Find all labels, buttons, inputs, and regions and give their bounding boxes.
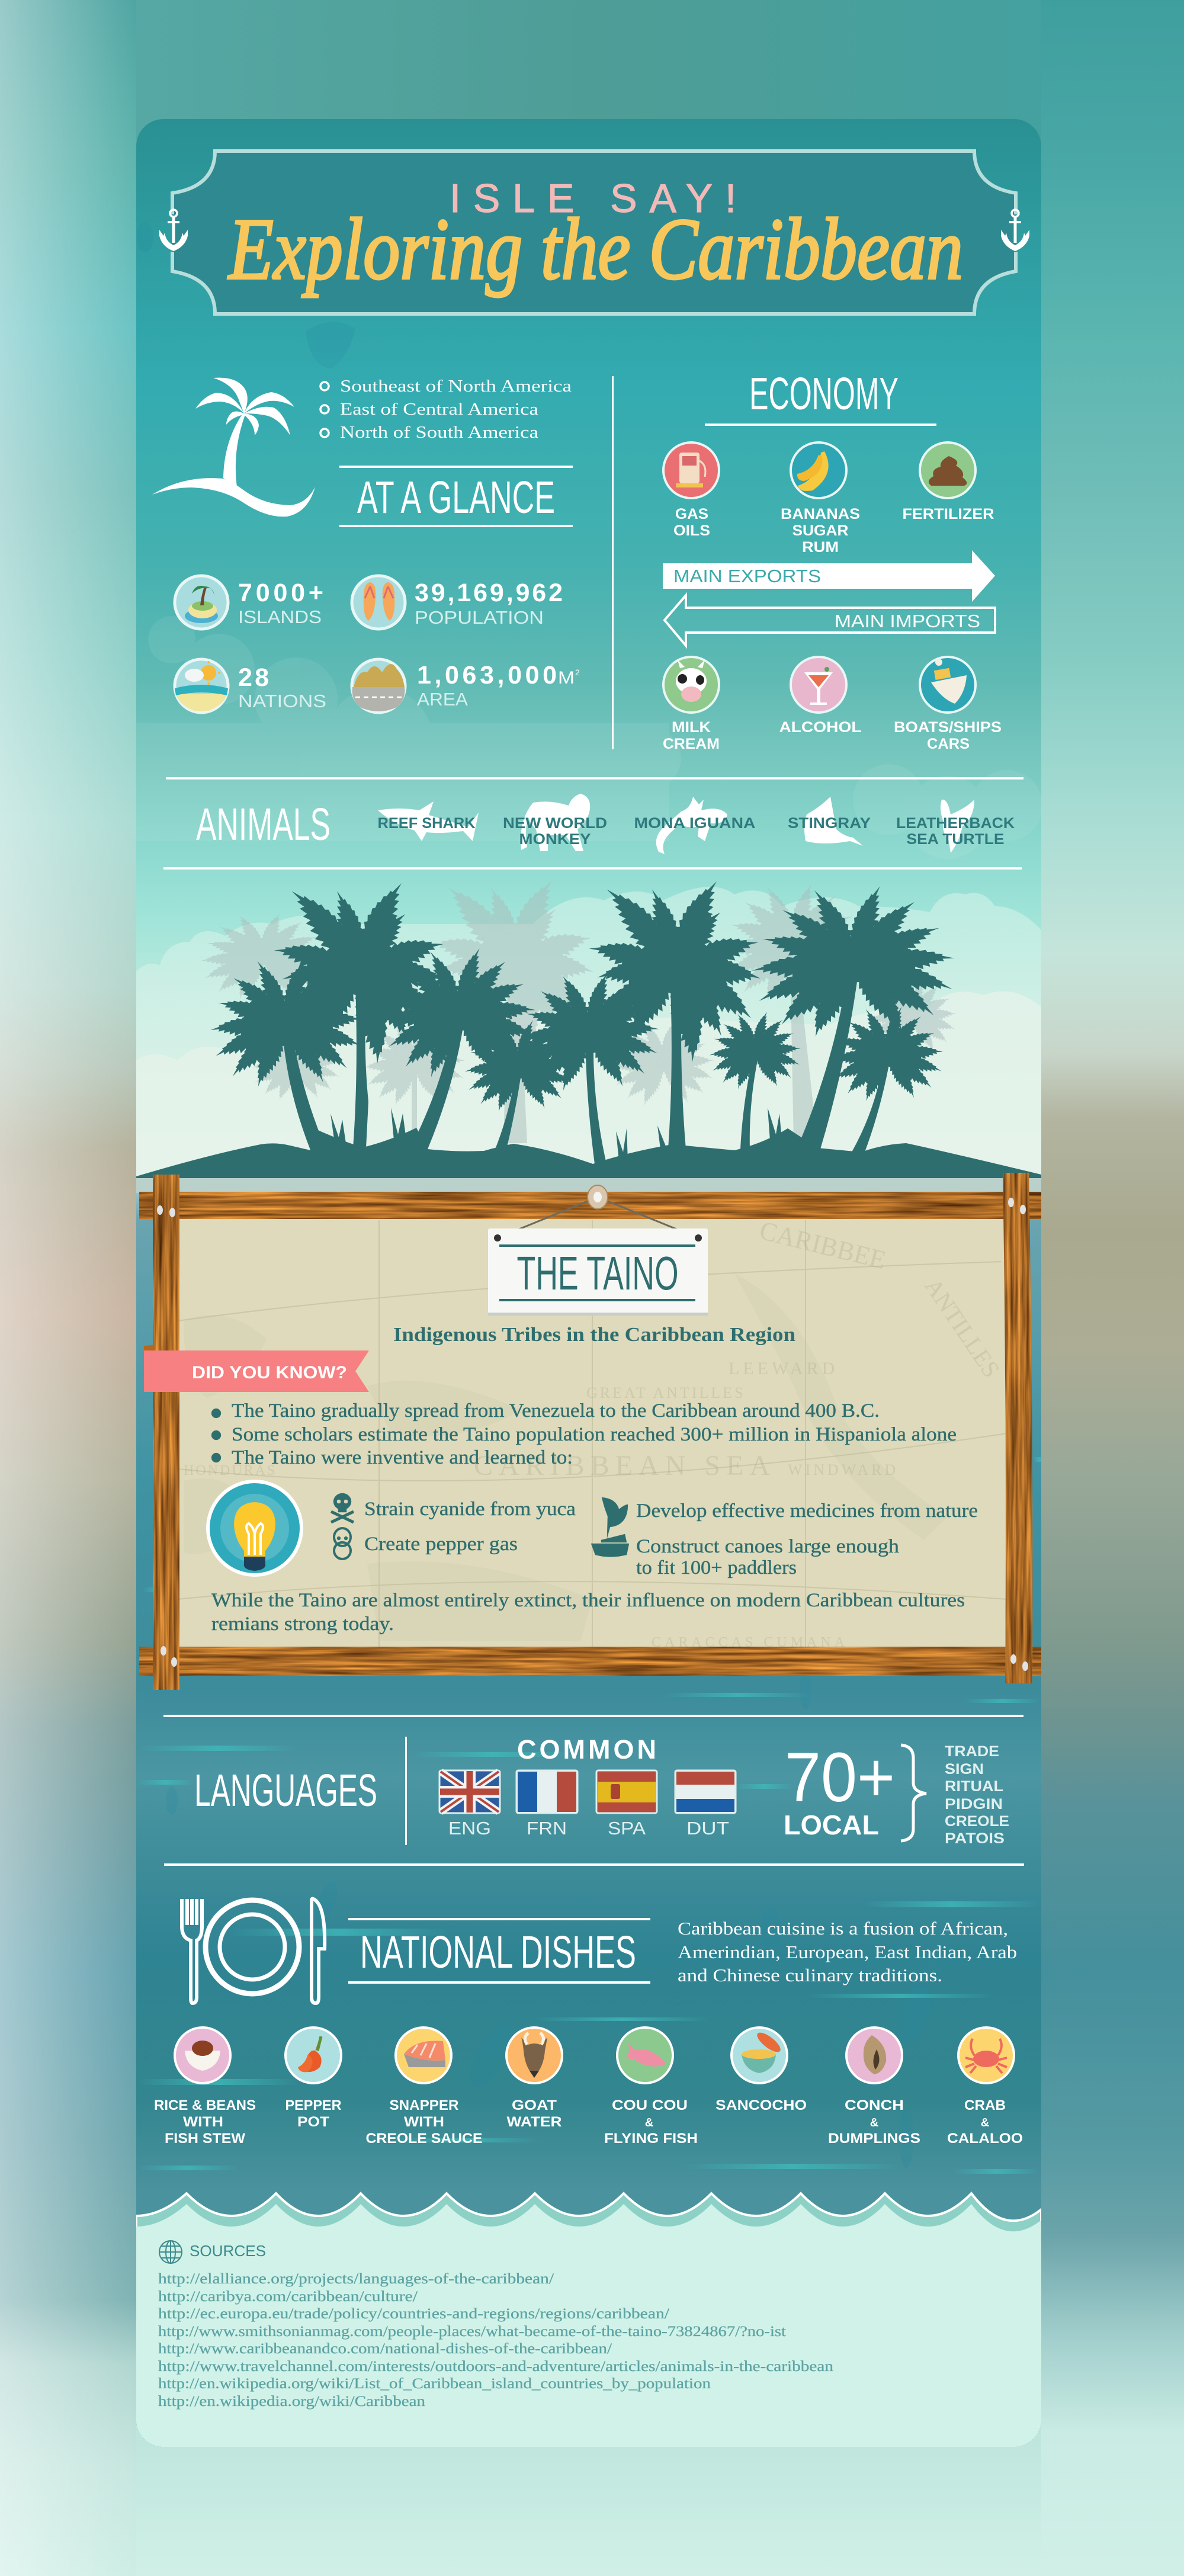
heading: animals: ANIMALS	[196, 799, 331, 850]
source links: http://en.wikipedia.org/wiki/Caribbean	[158, 2394, 426, 2410]
heading: economy: ECONOMY	[749, 368, 899, 419]
sign: the taino: THE TAINO	[516, 1247, 679, 1300]
flag: french: FRN	[527, 1818, 567, 1839]
animal: leatherback sea turtle: LEATHERBACK	[896, 815, 1015, 832]
source links	[158, 2271, 834, 2410]
import: milk cream: MILK	[672, 719, 711, 736]
heading: at a glance: AT A GLANCE	[357, 472, 555, 523]
dish: pepper pot: PEPPER	[285, 2097, 341, 2113]
flag: dutch: DUT	[686, 1818, 729, 1839]
arrow: main exports	[663, 550, 995, 602]
at a glance panel	[152, 377, 580, 713]
animal: mona iguana	[634, 797, 756, 854]
dish: cou cou and flying fish: &	[645, 2116, 653, 2129]
ribbon: did you know	[144, 1345, 369, 1392]
arrow: main imports: MAIN IMPORTS	[835, 611, 980, 631]
location bullets	[320, 377, 572, 442]
closing paragraph: remians strong today.	[211, 1613, 394, 1635]
animal: new world monkey: MONKEY	[519, 831, 591, 848]
source links: http://elalliance.org/projects/languages-of-the-caribbean/	[158, 2271, 554, 2287]
export: bananas sugar rum	[781, 442, 860, 556]
palm scene clouds	[136, 887, 1041, 1179]
stat: nations: NATIONS	[238, 691, 326, 711]
faded background palms	[191, 872, 957, 1143]
dish: sancocho	[715, 2028, 807, 2113]
dish: rice and beans with fish stew: WITH	[183, 2114, 223, 2130]
dish: conch and dumplings: &	[870, 2116, 878, 2129]
dish: cou cou and flying fish: COU COU	[612, 2097, 688, 2113]
animal: reef shark: REEF SHARK	[378, 815, 475, 832]
export: gas and oils: OILS	[673, 522, 710, 539]
flag: french	[516, 1770, 577, 1839]
animal: leatherback sea turtle	[896, 800, 1015, 853]
export: bananas sugar rum: SUGAR	[792, 522, 848, 539]
icon: gas mask	[334, 1528, 351, 1559]
brace	[901, 1745, 926, 1841]
import: milk cream	[663, 657, 720, 752]
dish: cou cou and flying fish: FLYING FISH	[604, 2131, 698, 2147]
location bullets: East of Central America	[340, 400, 538, 419]
import: boats, ships, cars: BOATS/SHIPS	[894, 719, 1002, 736]
heading: languages: LANGUAGES	[194, 1765, 377, 1816]
import: alcohol	[779, 657, 861, 736]
arrow: main exports: MAIN EXPORTS	[673, 566, 821, 586]
stat: population: POPULATION	[415, 607, 544, 628]
dish: goat water: GOAT	[512, 2097, 557, 2113]
local language types: CREOLE	[945, 1813, 1009, 1830]
grass	[331, 1108, 782, 1161]
stat: nations	[175, 659, 326, 713]
stat: 70+ local: LOCAL	[784, 1810, 879, 1840]
dish: crab and calaloo: CALALOO	[947, 2131, 1023, 2147]
source links: http://www.travelchannel.com/interests/outdoors-and-adventure/articles/animals-in-the-caribbean	[158, 2359, 834, 2375]
icon: canoe	[591, 1534, 629, 1557]
invention: medicines: Develop effective medicines from nature	[636, 1500, 978, 1522]
cuisine description	[678, 1918, 1017, 1985]
title plaque	[159, 151, 1029, 314]
dish: snapper with creole sauce: WITH	[404, 2114, 444, 2130]
dish: crab and calaloo: &	[981, 2116, 989, 2129]
stat: nations: 28	[238, 663, 269, 692]
clouds behind at a glance	[136, 616, 1042, 859]
flag: dutch	[675, 1770, 736, 1839]
icon: light bulb	[208, 1481, 301, 1575]
right wood post	[1003, 1173, 1032, 1683]
bottom wood beam	[139, 1647, 1041, 1676]
import: boats, ships, cars: CARS	[927, 736, 970, 752]
heading: national dishes	[348, 1918, 650, 1984]
flag: spanish	[596, 1770, 657, 1839]
export: bananas sugar rum: RUM	[802, 539, 839, 556]
parchment map	[177, 1215, 1009, 1651]
heading: sources: SOURCES	[190, 2242, 266, 2260]
invention: canoes	[636, 1536, 900, 1579]
animal: new world monkey	[503, 794, 607, 851]
dish: snapper with creole sauce: CREOLE SAUCE	[366, 2131, 482, 2147]
palm 3	[373, 945, 537, 1149]
local language types: TRADE	[945, 1743, 999, 1760]
inventions list	[331, 1493, 978, 1579]
left wood post	[153, 1175, 179, 1690]
import: boats, ships, cars	[894, 657, 1002, 752]
export: bananas sugar rum: BANANAS	[781, 506, 860, 522]
animal: stingray	[788, 797, 871, 846]
common languages label: COMMON	[517, 1734, 656, 1765]
ribbon: did you know: DID YOU KNOW?	[192, 1363, 347, 1382]
export: fertilizer: FERTILIZER	[903, 506, 994, 522]
stat: area: 1,063,000	[417, 661, 557, 689]
subtitle: Indigenous Tribes in the Caribbean Region	[393, 1324, 795, 1346]
fact bullets: The Taino were inventive and learned to:	[232, 1447, 573, 1468]
dish: rice and beans with fish stew: RICE & BEANS	[154, 2097, 256, 2113]
fact bullets	[211, 1400, 957, 1468]
background blotches	[168, 367, 333, 1790]
dish: conch and dumplings: CONCH	[845, 2097, 904, 2113]
invention: pepper gas: Create pepper gas	[364, 1534, 518, 1555]
palm 6	[586, 874, 762, 1149]
import: alcohol: ALCOHOL	[779, 719, 861, 736]
export: gas and oils: GAS	[675, 506, 708, 522]
stat: population: 39,169,962	[415, 579, 563, 607]
dish: crab and calaloo	[947, 2028, 1023, 2147]
divider	[612, 376, 614, 749]
invention: canoes: to fit 100+ paddlers	[636, 1557, 797, 1579]
dish: cou cou and flying fish	[604, 2028, 698, 2147]
local language types	[945, 1743, 1009, 1847]
national dishes section	[154, 1899, 1023, 2147]
dish: rice and beans with fish stew: FISH STEW	[165, 2131, 245, 2147]
fact bullets: The Taino gradually spread from Venezuela to the Caribbean around 400 B.C.	[232, 1400, 880, 1422]
dish: goat water: WATER	[507, 2114, 561, 2130]
animal: new world monkey: NEW WORLD	[503, 815, 607, 832]
palm 8	[739, 882, 956, 1149]
palm 5	[510, 969, 660, 1164]
main title: Exploring the Caribbean	[227, 201, 963, 298]
dish: snapper with creole sauce	[366, 2028, 482, 2147]
nails	[157, 1198, 1028, 1671]
invention: canoes: Construct canoes large enough	[636, 1536, 900, 1557]
cuisine description: Amerindian, European, East Indian, Arab	[678, 1942, 1017, 1962]
infographic card	[136, 119, 1045, 2463]
export: gas and oils	[663, 442, 719, 539]
animal: leatherback sea turtle: SEA TURTLE	[906, 831, 1005, 848]
local language types: SIGN	[945, 1761, 984, 1778]
local language types: PATOIS	[945, 1830, 1005, 1847]
hanging string and pin	[498, 1185, 698, 1238]
parchment map: WINDWARD	[788, 1461, 899, 1478]
invention: cyanide: Strain cyanide from yuca	[364, 1499, 576, 1520]
flag: english	[439, 1770, 500, 1839]
stat: area: AREA	[417, 689, 468, 710]
flag: english: ENG	[448, 1818, 491, 1839]
dish: conch and dumplings	[828, 2028, 920, 2147]
palm tree silhouettes	[136, 874, 1041, 1179]
icon: leaf	[602, 1497, 628, 1538]
icon: skull	[331, 1493, 354, 1522]
fact bullets: Some scholars estimate the Taino population reached 300+ million in Hispaniola alone	[232, 1424, 957, 1445]
export: fertilizer	[903, 442, 994, 522]
stat: area: M	[558, 668, 575, 688]
sign: the taino	[488, 1228, 708, 1316]
animal: mona iguana: MONA IGUANA	[634, 815, 756, 832]
source links: http://ec.europa.eu/trade/policy/countries-and-regions/regions/caribbean/	[158, 2306, 669, 2322]
heading: national dishes: NATIONAL DISHES	[360, 1927, 636, 1978]
stat: 70+ local: 70+	[785, 1738, 895, 1817]
dish: pepper pot	[285, 2028, 341, 2130]
closing paragraph: While the Taino are almost entirely extinct, their influence on modern Caribbean cultures	[211, 1590, 965, 1611]
arrow: main imports	[665, 595, 995, 646]
icon: globe	[159, 2241, 182, 2263]
parchment map: LEEWARD	[729, 1359, 838, 1378]
dish: snapper with creole sauce: SNAPPER	[390, 2097, 458, 2113]
icon: fork, plate and knife	[182, 1899, 325, 2003]
stat: islands	[175, 576, 323, 629]
stat: area: 2	[575, 668, 580, 677]
location bullets: Southeast of North America	[340, 377, 572, 396]
source links: http://caribya.com/caribbean/culture/	[158, 2289, 418, 2305]
import: milk cream: CREAM	[663, 736, 720, 752]
icon: left anchor	[159, 210, 188, 251]
parchment map: CARIBBEAN SEA	[474, 1450, 776, 1481]
stat: population	[352, 576, 563, 629]
source links: http://en.wikipedia.org/wiki/List_of_Caribbean_island_countries_by_population	[158, 2376, 711, 2392]
dish: pepper pot: POT	[297, 2114, 329, 2130]
parchment map: CARIBBEE	[757, 1215, 889, 1275]
parchment map: HONDURAS	[184, 1463, 277, 1478]
animals strip	[163, 777, 1023, 870]
parchment map: ANTILLES	[920, 1273, 1005, 1382]
local language types: PIDGIN	[945, 1796, 1003, 1812]
heading: economy	[705, 368, 936, 426]
title kicker: ISLE SAY!	[450, 176, 736, 221]
source links: http://www.smithsonianmag.com/people-places/what-became-of-the-taino-73824867/?no-ist	[158, 2324, 786, 2340]
dish: sancocho: SANCOCHO	[715, 2097, 807, 2113]
stat: area	[352, 659, 580, 713]
icon: palm island	[152, 378, 315, 517]
dish: goat water	[506, 2028, 562, 2130]
dish: conch and dumplings: DUMPLINGS	[828, 2131, 920, 2147]
dish: rice and beans with fish stew	[154, 2028, 256, 2147]
dish: crab and calaloo: CRAB	[964, 2097, 1006, 2113]
location bullets: North of South America	[340, 423, 538, 442]
sea streaks	[136, 1457, 1045, 2174]
source links: http://www.caribbeanandco.com/national-dishes-of-the-caribbean/	[158, 2341, 612, 2357]
stat: islands: 7000+	[238, 579, 323, 607]
icon: right anchor	[1001, 210, 1029, 251]
flag: spanish: SPA	[608, 1818, 646, 1839]
palm 1	[200, 954, 364, 1151]
the taino map board	[139, 1173, 1041, 1690]
animal: stingray: STINGRAY	[788, 815, 871, 832]
palm 2	[271, 875, 447, 1148]
heading: at a glance	[339, 466, 573, 527]
animal: reef shark	[378, 801, 479, 841]
hills	[136, 1128, 1041, 1179]
stat: islands: ISLANDS	[238, 607, 322, 627]
local language types: RITUAL	[945, 1778, 1003, 1795]
parchment map: GREAT ANTILLES	[586, 1384, 746, 1401]
palm 4	[458, 1018, 573, 1149]
economy panel	[663, 368, 1002, 752]
top wood beam	[139, 1192, 1041, 1219]
palm 9	[824, 1004, 944, 1152]
parchment map: CARACCAS CUMANA	[652, 1635, 848, 1650]
palm 7	[704, 1010, 801, 1149]
pale strip above board	[136, 1178, 1041, 1193]
closing paragraph	[211, 1590, 965, 1635]
sources panel	[158, 2241, 834, 2410]
wave divider	[136, 2193, 1041, 2463]
languages section	[163, 1715, 1024, 1866]
cuisine description: and Chinese culinary traditions.	[678, 1965, 942, 1985]
cuisine description: Caribbean cuisine is a fusion of African,	[678, 1918, 1008, 1939]
